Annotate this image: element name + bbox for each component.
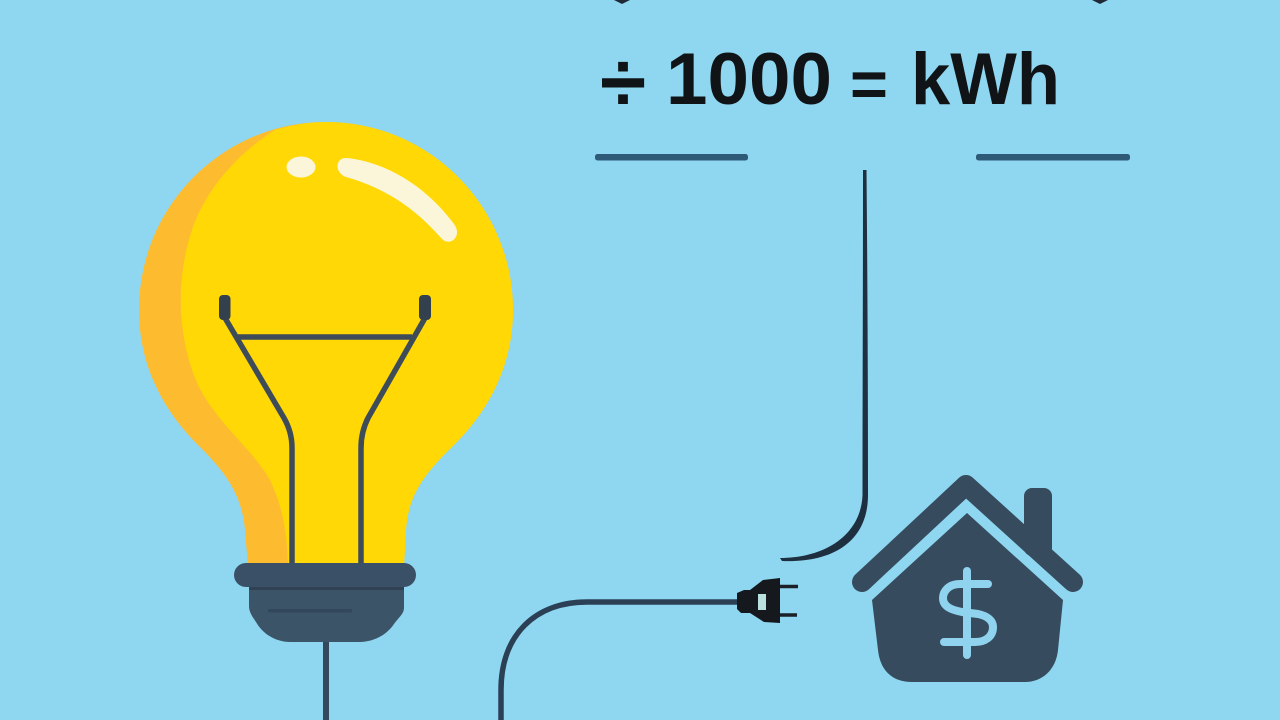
- filament post: left: [219, 295, 230, 320]
- formula text: =: [850, 47, 888, 120]
- roof gap: [870, 506, 1066, 595]
- plug prongs: [780, 586, 798, 615]
- roof: [862, 485, 1073, 582]
- long curved wire: [780, 170, 868, 561]
- formula text: kWh: [911, 39, 1060, 120]
- bulb base groove: [268, 609, 352, 612]
- bulb glass shaded edge: [139, 122, 513, 566]
- icon: house with dollar: [862, 485, 1073, 682]
- formula text: ÷: [600, 35, 646, 129]
- arrow tip: right: [1092, 0, 1108, 4]
- icon: plug: [737, 578, 798, 623]
- plug notch: [758, 594, 766, 610]
- formula text: 1000: [666, 39, 832, 120]
- highlight: arc: [337, 158, 457, 242]
- bulb glass yellow face: [181, 122, 513, 566]
- plug cord: [501, 602, 740, 720]
- bulb base collar: [234, 563, 416, 587]
- filament post: right: [419, 295, 431, 320]
- chimney: [1024, 488, 1052, 556]
- formula text: [600, 35, 1060, 129]
- bulb base body: [249, 582, 404, 642]
- highlight: dot: [286, 156, 316, 178]
- divider: left: [595, 154, 748, 160]
- bulb base shadow: [249, 585, 404, 590]
- filament wires: [225, 318, 425, 565]
- bulb wire: [323, 642, 329, 720]
- house body: [872, 513, 1063, 682]
- divider: right: [976, 154, 1130, 160]
- dollar sign: [943, 571, 993, 655]
- arrow tip: left: [614, 0, 630, 4]
- icon: light bulb: [139, 122, 513, 720]
- plug body: [737, 578, 780, 623]
